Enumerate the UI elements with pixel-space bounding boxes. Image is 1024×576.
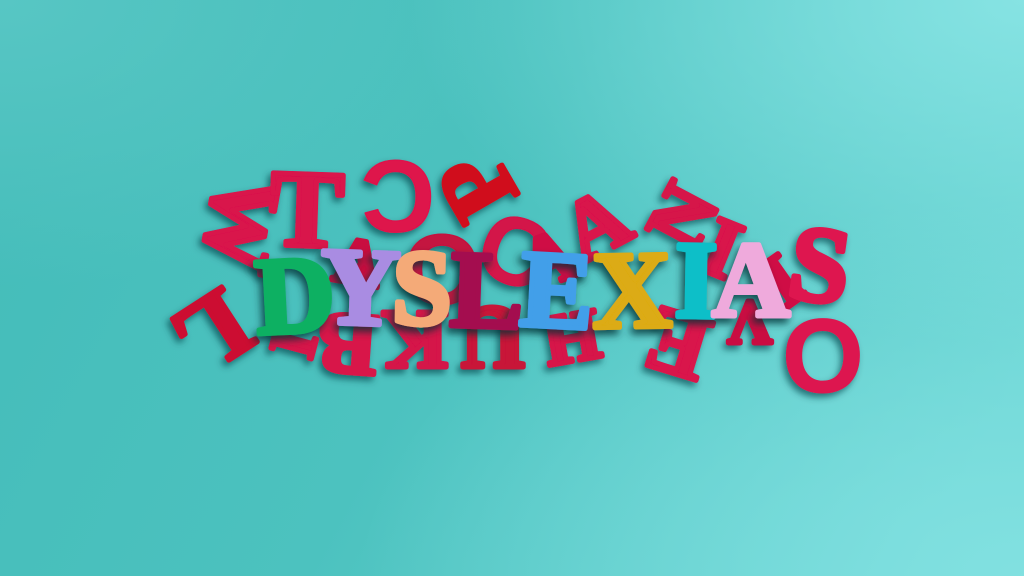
- letter: S right: S: [782, 202, 858, 329]
- letter: O right: O: [782, 298, 864, 415]
- letter: bar behind A: I: [746, 238, 818, 324]
- letter: S peach: S: [391, 228, 453, 349]
- letter: L far left: L: [155, 267, 272, 397]
- letter: bar below D: I: [257, 322, 332, 365]
- letter: E blue: E: [517, 227, 597, 353]
- letter: partial A left of E: A: [510, 212, 588, 308]
- letter: A pink: A: [712, 221, 790, 340]
- letter: W left: W: [180, 168, 302, 281]
- letter: B lower left: B: [315, 293, 381, 394]
- letter: I upper right: I: [689, 199, 754, 298]
- letter: L maroon: L: [448, 228, 526, 352]
- letter: small A behind Y: A: [328, 222, 388, 303]
- scattered red letters: [155, 134, 864, 415]
- letter: C behind L: C: [464, 189, 565, 314]
- letter: I turquoise: I: [674, 219, 718, 341]
- letter: dark O behind S: O: [403, 214, 481, 326]
- letter: K lower left: K: [382, 293, 448, 386]
- letter: T top left: T: [268, 147, 346, 271]
- letter: C top: C: [361, 139, 435, 253]
- letter: E lower right: E: [632, 286, 721, 402]
- word: DYSLEXIA in coloured letters: [252, 219, 790, 358]
- letter: wedge behind A: V: [727, 288, 772, 356]
- letter: D green: D: [252, 232, 338, 358]
- letter: P top: P: [416, 134, 538, 238]
- letter: U lower centre: U: [460, 288, 526, 387]
- letter: A upper centre: A: [546, 167, 645, 281]
- letter: Y purple: Y: [318, 225, 402, 349]
- letter: H lower centre: H: [537, 294, 607, 382]
- letter: N upper right: N: [628, 169, 737, 264]
- letter: X yellow: X: [591, 228, 673, 352]
